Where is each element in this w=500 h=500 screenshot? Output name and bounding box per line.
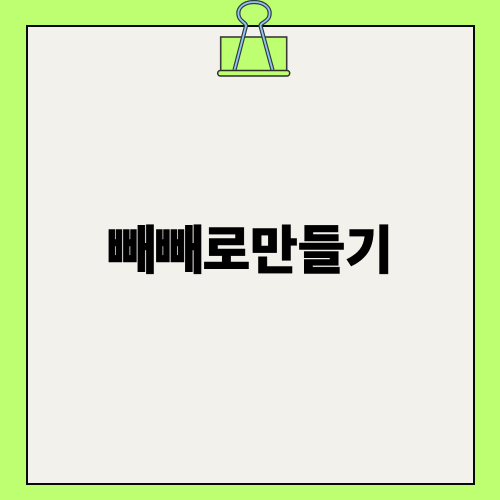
title: 빼빼로만들기 bbox=[107, 222, 393, 280]
clip wire loop bbox=[234, 2, 272, 70]
icon: binder clip bbox=[216, 0, 290, 77]
clip body bbox=[221, 37, 287, 71]
clip base bar bbox=[218, 70, 290, 76]
